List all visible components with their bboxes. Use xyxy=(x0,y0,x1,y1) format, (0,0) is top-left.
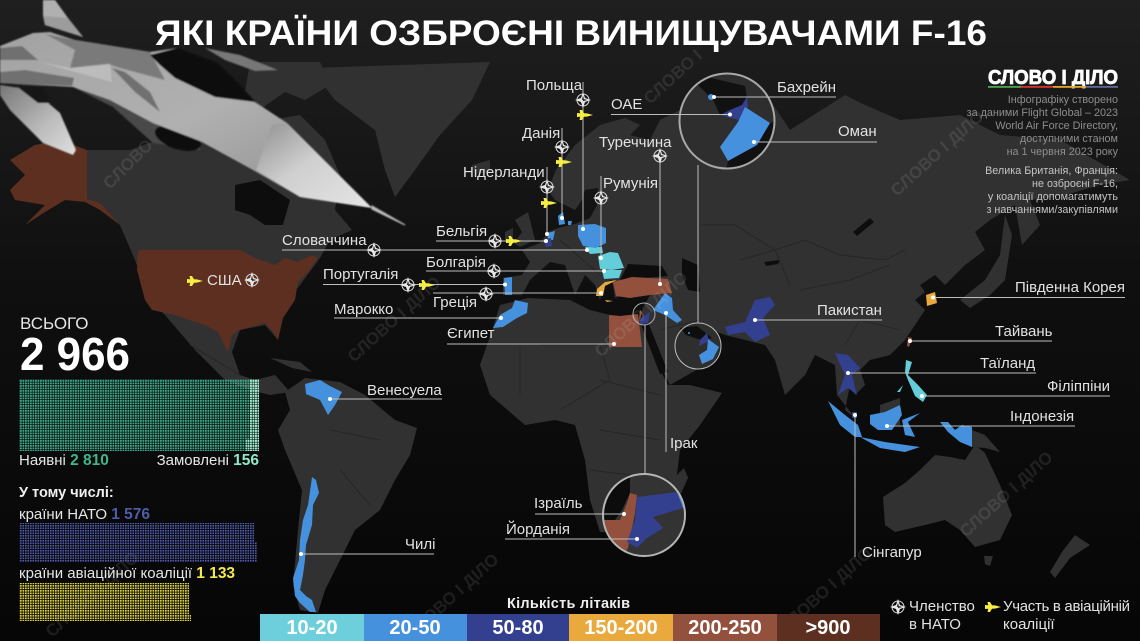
country labels: Бахрейн xyxy=(777,79,836,96)
watermarks: СЛОВО І xyxy=(640,46,706,108)
source text xyxy=(967,94,1119,158)
legend: aircraft count scale: >900 xyxy=(805,617,851,639)
source text: Інфографіку створено xyxy=(1008,94,1118,106)
country labels: Словаччина xyxy=(282,232,367,249)
note: Great Britain and France: з навчаннями/закупівлями xyxy=(986,204,1118,216)
country labels: Данія xyxy=(522,125,560,142)
watermarks: СЛОВО І ДІЛО xyxy=(344,273,445,366)
country labels: Пакистан xyxy=(817,302,882,319)
countries: 10-20 aircraft xyxy=(585,247,927,402)
country labels: Індонезія xyxy=(1010,408,1074,425)
countries: 150-200 aircraft xyxy=(596,280,937,306)
note: Great Britain and France: у коаліції допомагатимуть xyxy=(988,191,1118,203)
legend: aircraft count scale: 200-250 xyxy=(688,617,762,639)
small inset: Israel marker xyxy=(633,303,655,325)
source text: World Air Force Directory, xyxy=(995,120,1118,132)
country labels: Чилі xyxy=(405,536,435,553)
country labels: Марокко xyxy=(334,301,393,318)
country labels: Тайвань xyxy=(995,323,1053,340)
country labels: Венесуела xyxy=(367,382,442,399)
coalition count: країни авіаційної коаліції 1 133 xyxy=(19,565,235,582)
dot chart: coalition xyxy=(19,583,191,621)
total label: ВСЬОГО xyxy=(20,314,89,333)
note: Great Britain and France xyxy=(985,165,1118,216)
tail fin xyxy=(43,0,83,37)
legend: aircraft count scale xyxy=(260,614,880,641)
available aircraft: Наявні 2 810 xyxy=(19,452,109,469)
watermarks: СЛОВО І ДІЛО xyxy=(402,550,503,641)
legend: aviation coalition: коаліції xyxy=(1003,616,1055,633)
legend: aviation coalition: Участь в авіаційній xyxy=(1003,598,1130,615)
legend: NATO membership xyxy=(890,598,975,633)
country borders xyxy=(190,225,905,505)
panel: totals xyxy=(19,314,259,621)
country labels: Болгарія xyxy=(426,254,486,271)
country labels: Таїланд xyxy=(980,355,1035,372)
legend title: Кількість літаків xyxy=(507,596,630,612)
country labels: Ізраїль xyxy=(534,495,583,512)
country labels: Єгипет xyxy=(447,325,495,342)
watermarks: СЛОВО І ДІЛО xyxy=(775,544,876,637)
legend: aircraft count scale: 150-200 xyxy=(584,617,658,639)
country labels: Нідерланди xyxy=(463,164,545,181)
countries: 50-80 aircraft xyxy=(543,238,860,418)
country labels: США xyxy=(207,272,242,289)
country labels xyxy=(207,77,1125,561)
inset: Oman and UAE xyxy=(680,74,780,175)
connector lines xyxy=(282,82,1125,557)
connector dots xyxy=(299,95,935,556)
watermarks: СЛОВО І ДІЛО xyxy=(956,448,1057,541)
NATO count: країни НАТО 1 576 xyxy=(19,506,150,523)
country labels: Греція xyxy=(433,294,477,311)
note: Great Britain and France: Велика Британія, Франція: xyxy=(985,165,1118,177)
F-16 fighter jet xyxy=(0,0,405,225)
lower fuselage xyxy=(73,87,200,150)
intake bulge xyxy=(152,120,204,156)
pitot probe xyxy=(372,206,405,225)
watermarks: СЛОВО І ДІЛО xyxy=(591,268,692,361)
country labels: Бельгія xyxy=(436,223,487,240)
coalition jet icons xyxy=(187,110,593,290)
legend: aircraft count scale: 10-20 xyxy=(286,617,338,639)
watermarks: СЛОВО І ДІЛО xyxy=(42,548,143,641)
subheading: У тому числі: xyxy=(19,485,114,501)
country labels: ОАЕ xyxy=(611,96,642,113)
country labels: Йорданія xyxy=(506,520,570,538)
title: ЯКІ КРАЇНИ ОЗБРОЄНІ ВИНИЩУВАЧАМИ F-16 xyxy=(155,13,987,53)
country labels: Румунія xyxy=(603,175,658,192)
map: highlighted countries xyxy=(10,140,972,612)
NATO icons xyxy=(244,92,668,302)
legend: NATO membership: в НАТО xyxy=(909,616,961,633)
source text: за даними Flight Global – 2023 xyxy=(967,107,1118,119)
legend: aircraft count scale: 20-50 xyxy=(389,617,441,639)
countries: 20-50 aircraft xyxy=(293,212,972,612)
world map xyxy=(87,62,1130,613)
country labels: Польща xyxy=(526,77,583,94)
country labels: Ірак xyxy=(670,435,698,452)
dot chart: total fleet xyxy=(19,379,259,451)
country labels: Сінгапур xyxy=(862,544,922,561)
logo: СЛОВО І ДІЛО xyxy=(988,67,1118,89)
country labels: Португалія xyxy=(323,266,398,283)
fuselage xyxy=(0,32,372,208)
country labels: Південна Корея xyxy=(1015,279,1125,296)
total number: 2 966 xyxy=(20,328,130,380)
fuel tank xyxy=(0,85,76,155)
watermarks: СЛОВО І ДІЛО xyxy=(887,107,988,200)
country labels: Оман xyxy=(838,123,877,140)
dot chart: NATO xyxy=(19,523,257,562)
canopy xyxy=(150,48,255,102)
source text: доступними станом xyxy=(1020,133,1118,145)
countries: 200-250 aircraft xyxy=(609,277,912,347)
source text: на 1 червня 2023 року xyxy=(1007,146,1119,158)
ordered aircraft: Замовлені 156 xyxy=(157,452,259,469)
note: Great Britain and France: не озброєні F-16, xyxy=(1032,178,1118,190)
seas and lakes xyxy=(235,180,874,374)
country: USA and Alaska (>900) xyxy=(10,140,318,352)
missile xyxy=(205,48,278,71)
legend: NATO membership: Членство xyxy=(909,598,975,615)
watermarks: СЛОВО xyxy=(99,135,157,193)
small inset: Persian Gulf marker xyxy=(675,323,721,369)
legend: aviation coalition xyxy=(985,598,1130,633)
legend: aircraft count scale: 50-80 xyxy=(492,617,544,639)
country labels: Філіппіни xyxy=(1047,378,1110,395)
nose cone xyxy=(256,123,372,208)
inset: Israel and Jordan xyxy=(600,470,686,560)
camouflage xyxy=(45,34,165,80)
country labels: Туреччина xyxy=(599,134,672,151)
